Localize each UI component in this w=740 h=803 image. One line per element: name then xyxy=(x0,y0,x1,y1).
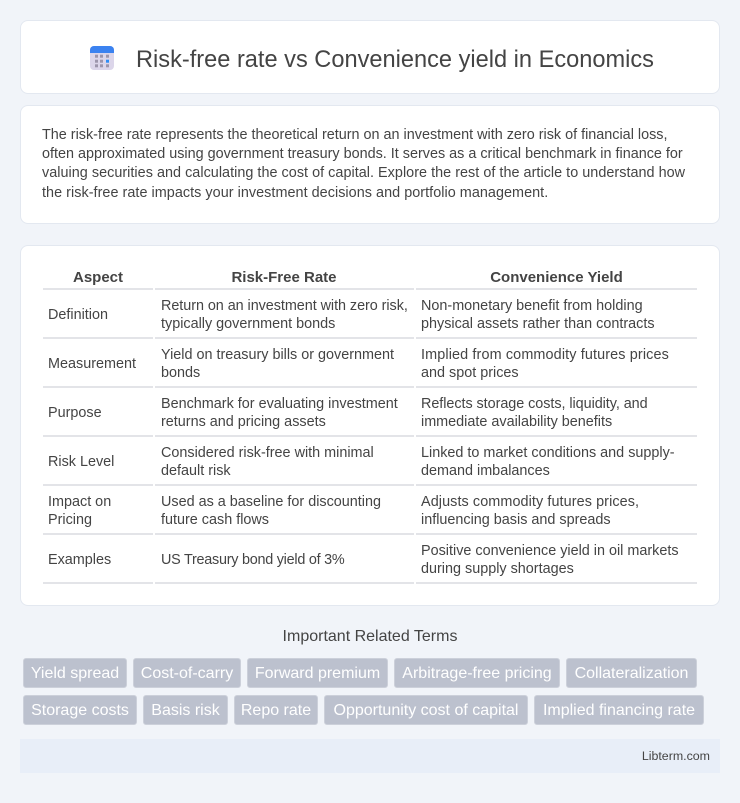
row: measurement: Implied from commodity futures prices xyxy=(421,347,669,363)
row: examples: Examples xyxy=(48,552,111,568)
row: risk level xyxy=(48,445,675,479)
row: definition: Definition xyxy=(48,307,108,323)
related terms tags: Opportunity cost of capital xyxy=(334,702,518,719)
row: definition: Non-monetary benefit from holding xyxy=(421,298,643,314)
row: risk level: Linked to market conditions and supply- xyxy=(421,445,675,461)
footer xyxy=(20,739,720,773)
intro text: the risk-free rate impacts your investment decisions and portfolio management. xyxy=(42,185,548,201)
row: risk level: Considered risk-free with minimal xyxy=(161,445,374,461)
table header: Risk-Free Rate xyxy=(231,269,337,286)
intro text xyxy=(42,127,685,201)
row: impact on pricing: Impact on xyxy=(48,494,111,510)
intro text: valuing securities and calculating the cost of capital. Explore the rest of the article to understand how xyxy=(42,165,685,181)
row: purpose xyxy=(48,396,648,430)
row: impact on pricing xyxy=(48,494,639,528)
intro text: The risk-free rate represents the theoretical return on an investment with zero risk of financial loss, xyxy=(42,127,667,143)
footer source: Libterm.com xyxy=(642,749,710,763)
related terms tags: Implied financing rate xyxy=(543,702,695,719)
table header: Aspect xyxy=(73,269,123,286)
related terms tags: Repo rate xyxy=(241,702,311,719)
row: examples: US Treasury bond yield of 3% xyxy=(161,552,344,568)
related terms tags xyxy=(23,658,704,725)
row: definition: typically government bonds xyxy=(161,316,335,332)
table header xyxy=(73,269,623,286)
row: impact on pricing: Used as a baseline for discounting xyxy=(161,494,381,510)
row: impact on pricing: Adjusts commodity futures prices, xyxy=(421,494,639,510)
row: examples: during supply shortages xyxy=(421,561,574,577)
related terms heading: Important Related Terms xyxy=(283,628,457,645)
row: measurement: and spot prices xyxy=(421,365,519,381)
row: purpose: immediate availability benefits xyxy=(421,414,612,430)
row: risk level: demand imbalances xyxy=(421,463,550,479)
related terms tags: Yield spread xyxy=(31,665,119,682)
icon: calendar xyxy=(90,46,114,70)
row: purpose: Benchmark for evaluating investment xyxy=(161,396,398,412)
row: purpose: returns and pricing assets xyxy=(161,414,326,430)
related terms tags: Forward premium xyxy=(255,665,380,682)
row: purpose: Purpose xyxy=(48,405,102,421)
row: impact on pricing: Pricing xyxy=(48,512,92,528)
row: impact on pricing: influencing basis and spreads xyxy=(421,512,611,528)
related terms tags: Arbitrage-free pricing xyxy=(402,665,552,682)
related terms tags: Storage costs xyxy=(31,702,129,719)
row: purpose: Reflects storage costs, liquidity, and xyxy=(421,396,648,412)
row: definition: Return on an investment with zero risk, xyxy=(161,298,408,314)
row: measurement: Yield on treasury bills or government xyxy=(161,347,394,363)
panel: comparison table xyxy=(20,245,720,606)
intro text: often approximated using government treasury bonds. It serves as a critical benchmark in finance for xyxy=(42,146,683,162)
comparison table xyxy=(43,269,697,584)
related terms tags: Collateralization xyxy=(575,665,688,682)
row: measurement: Measurement xyxy=(48,356,136,372)
row: examples xyxy=(48,543,679,577)
row: impact on pricing: future cash flows xyxy=(161,512,269,528)
table header: Convenience Yield xyxy=(490,269,623,286)
panel: introduction xyxy=(20,105,720,224)
row: measurement xyxy=(48,347,669,381)
row: risk level: default risk xyxy=(161,463,231,479)
row: definition xyxy=(48,298,655,332)
row: risk level: Risk Level xyxy=(48,454,114,470)
row: examples: Positive convenience yield in oil markets xyxy=(421,543,679,559)
row: definition: physical assets rather than contracts xyxy=(421,316,655,332)
row: measurement: bonds xyxy=(161,365,200,381)
related terms tags: Basis risk xyxy=(151,702,220,719)
title: Risk-free rate vs Convenience yield in Economics xyxy=(136,47,654,73)
related terms tags: Cost-of-carry xyxy=(141,665,233,682)
title card xyxy=(20,20,720,94)
